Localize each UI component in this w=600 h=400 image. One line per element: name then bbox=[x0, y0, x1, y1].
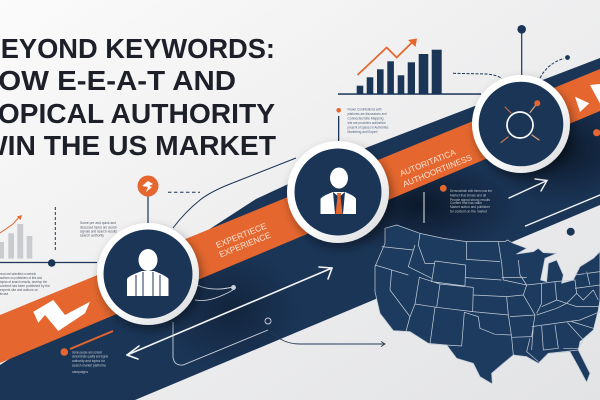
text block on navy band left bbox=[61, 331, 113, 374]
title bbox=[0, 33, 276, 161]
long arrow bottom right bbox=[271, 331, 385, 346]
left text block upper: Some pre and quick and bbox=[80, 221, 116, 225]
text block above band bbox=[336, 108, 389, 141]
left text block lower: content has been published by the bbox=[0, 284, 50, 288]
experience label: EXPERIENCE bbox=[218, 230, 272, 260]
left text block upper: signals and search results bbox=[80, 230, 117, 234]
text block on navy band left: authority and topics for bbox=[72, 359, 106, 363]
icon: person with orange tie bbox=[320, 168, 356, 214]
play icons on orange band bbox=[575, 84, 600, 112]
experience label: EXPERTIECE bbox=[214, 221, 268, 250]
text block above band: Marketing and Expert bbox=[348, 130, 378, 134]
text block on navy band left: campaigns bbox=[72, 370, 88, 374]
circle: authoritative network bbox=[472, 75, 570, 173]
curved connector and orange pin bbox=[138, 158, 296, 228]
left text block lower: experts site and authors on bbox=[0, 288, 38, 292]
authoritativeness label: AUTHOORTIINESS bbox=[401, 152, 474, 189]
text block on navy band left: Some people and content bbox=[72, 350, 102, 354]
icon: ring with spokes bbox=[501, 100, 540, 142]
left text block lower: most and submitted on website bbox=[0, 272, 36, 276]
text block above band: platforms are discussions and bbox=[348, 112, 387, 116]
logo on orange band bbox=[33, 300, 90, 331]
left text block lower: trust bbox=[0, 292, 8, 296]
dot on white right bbox=[567, 228, 575, 236]
text block on navy band left: search market platforms bbox=[72, 364, 106, 368]
authoritativeness label: AUTORITATICA bbox=[398, 147, 457, 178]
bar chart top bbox=[338, 38, 481, 95]
text block on navy band right bbox=[424, 185, 492, 223]
text block above band: present of spaces in Authorities bbox=[348, 126, 389, 130]
thin connector lines on navy bbox=[173, 285, 271, 365]
left text block lower: topics of search results, develop the bbox=[0, 280, 47, 284]
text block on navy band right: Market author and publisher bbox=[450, 205, 491, 209]
text block on navy band left: demonstrate quality and signal bbox=[72, 354, 108, 358]
orange diagonal band bbox=[0, 69, 600, 363]
orange dot right bbox=[593, 129, 600, 136]
left text block upper: search authority bbox=[80, 234, 104, 238]
left text block lower bbox=[0, 272, 50, 296]
text block above band: site are providers authorited bbox=[348, 121, 386, 125]
white arrow and line upper right of band bbox=[509, 179, 600, 226]
text block on navy band right: Demonstrate with them now the bbox=[450, 189, 492, 193]
text block on navy band right: for content on the market bbox=[450, 210, 487, 214]
left text block lower: authors on publishers of this and bbox=[0, 276, 42, 280]
US map bbox=[375, 225, 600, 384]
double-headed white arrow bbox=[127, 267, 332, 359]
text block above band: Connected Site Mapping bbox=[348, 116, 384, 120]
text block above band: Power Contributions with bbox=[348, 108, 382, 112]
icon: person with striped body bbox=[127, 249, 168, 296]
text block on navy band right: Market that shows and all bbox=[450, 194, 486, 198]
left mini chart bbox=[0, 207, 97, 267]
circle: experience person bbox=[97, 223, 199, 325]
pin and dashed connectors top right bbox=[453, 25, 570, 78]
left text block upper: discussed topics are search bbox=[80, 226, 117, 230]
left text block upper bbox=[80, 221, 117, 238]
text block on navy band right: People signal strong results bbox=[450, 198, 490, 202]
text block on navy band right: Content that has value bbox=[450, 201, 482, 205]
circle: authority person bbox=[287, 141, 389, 243]
